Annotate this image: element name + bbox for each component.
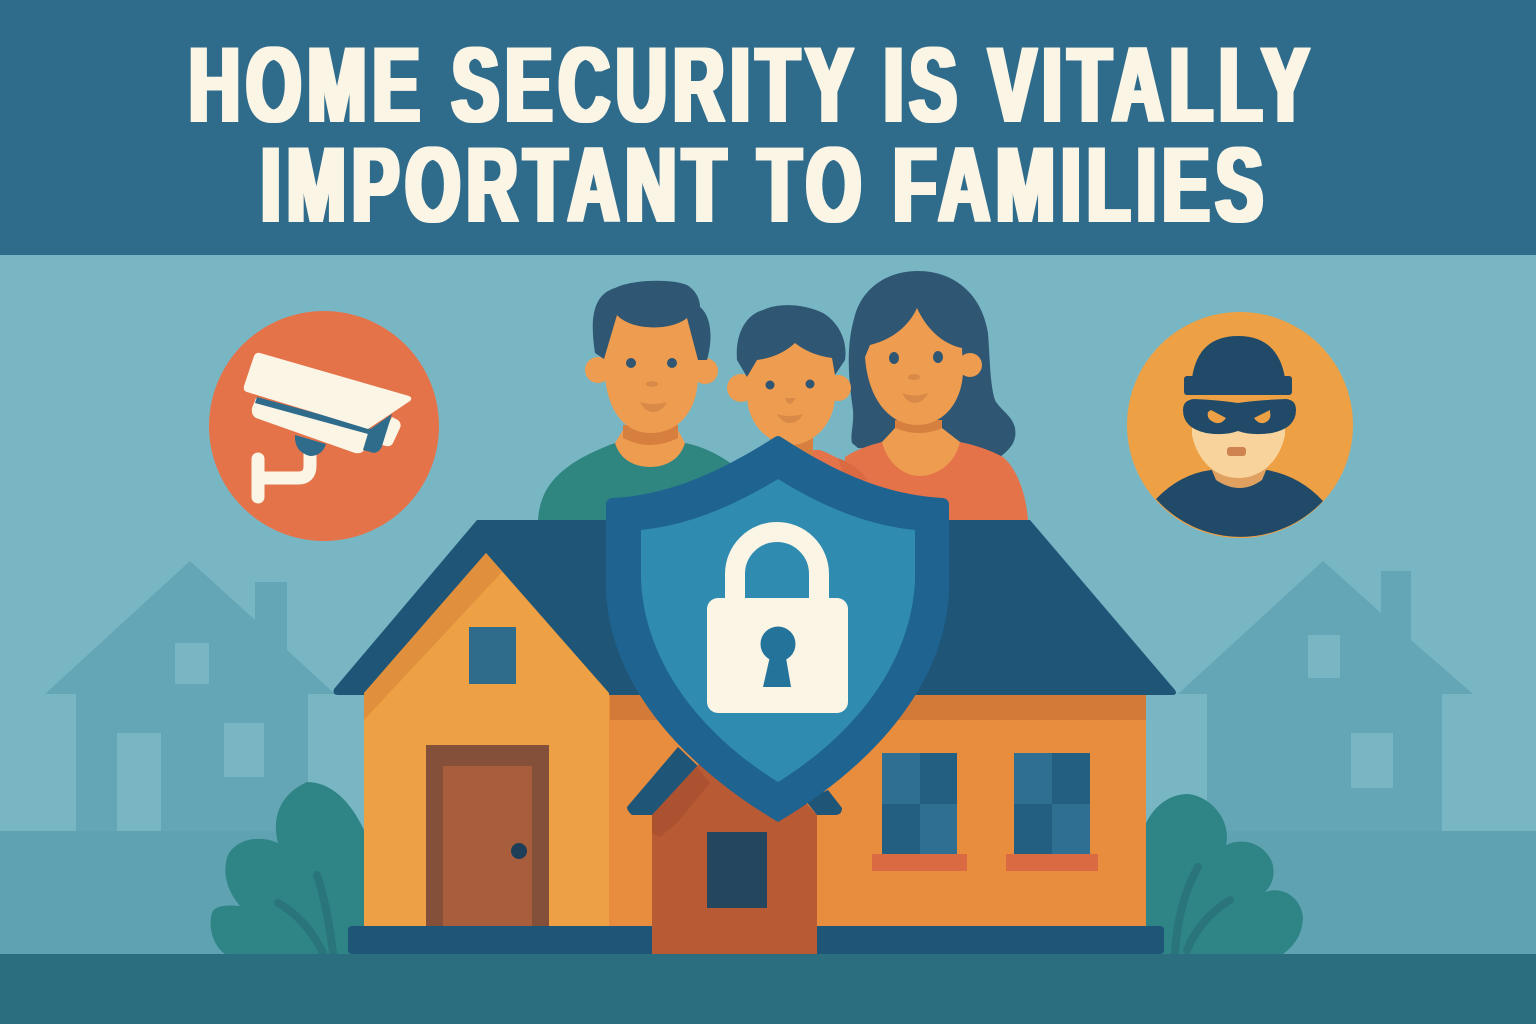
- title: [189, 26, 1309, 245]
- mother: [845, 271, 1028, 520]
- bush right: [1146, 794, 1303, 954]
- porch: [627, 725, 842, 954]
- ground: [0, 954, 1536, 1024]
- background house right: [1178, 561, 1473, 831]
- burglar icon: [1127, 312, 1353, 538]
- burglar body: [1156, 470, 1323, 537]
- gable: [364, 553, 609, 927]
- shield with padlock: [606, 436, 949, 822]
- foundation: [348, 926, 1164, 954]
- father: [538, 281, 740, 520]
- door: [426, 745, 549, 927]
- child: [727, 305, 870, 490]
- bush left: [211, 782, 364, 954]
- background house left: [45, 561, 335, 931]
- roof: [334, 520, 1176, 695]
- title: IMPORTANT TO FAMILIES: [261, 126, 1263, 245]
- title banner: [0, 0, 1536, 255]
- house walls: [364, 695, 1146, 927]
- camera mount: [258, 450, 310, 497]
- main house: [334, 520, 1176, 954]
- camera icon: [209, 311, 439, 541]
- family: [538, 271, 1028, 520]
- right window 2: [1006, 753, 1098, 871]
- upper window: [469, 627, 516, 684]
- title: HOME SECURITY IS VITALLY: [189, 26, 1309, 145]
- padlock: [707, 532, 848, 713]
- right window 1: [872, 753, 967, 871]
